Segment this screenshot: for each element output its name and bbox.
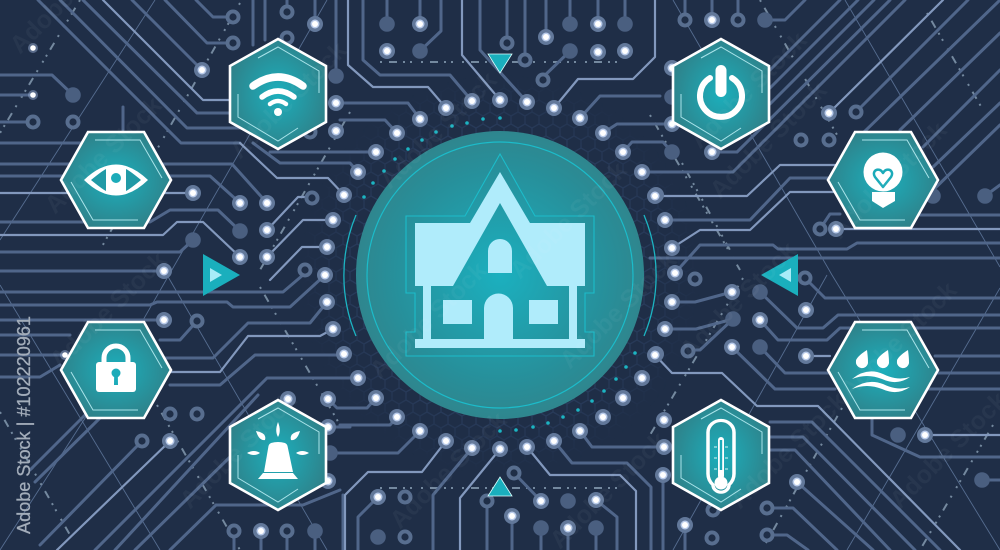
watermark text: Adobe Stock [674,236,802,364]
watermark text: Adobe Stock [684,26,812,154]
icon: wifi [253,77,303,116]
icon: thermometer [708,420,734,492]
watermark text: Adobe Stock [44,246,172,374]
stock id label: Adobe Stock | #102220961 [14,316,34,534]
circuit traces: bottom right [655,278,1000,550]
teal dots around the circle [362,116,637,433]
icon: house [415,172,585,348]
watermark text: Adobe Stock [224,36,352,164]
circuit traces: bottom left [30,378,420,550]
watermark text: Adobe Stock [724,386,852,514]
triangle marker: right [761,254,798,296]
hexagon mesh behind the central circle [326,100,676,450]
icon: siren [247,422,309,479]
watermark text: Adobe Stock [384,406,512,534]
watermark text: Adobe Stock [364,256,492,384]
triangle marker: left [203,254,240,296]
panel: eye hexagon [61,132,171,228]
circuit traces: top centre [340,0,672,133]
icon: power [700,65,742,117]
panel: thermometer hexagon [673,400,769,510]
icon: water drops and waves [852,350,910,392]
watermark text: Adobe Stock [824,116,952,244]
panel: bulb hexagon [828,132,938,228]
house outline [406,154,594,356]
circuit traces: top right [623,0,1000,273]
watermark text: Adobe Stock [374,66,502,194]
panel: lock hexagon [61,322,171,418]
watermark text: Adobe Stock [554,246,682,374]
circuit traces: top left [0,0,376,195]
watermark text: Adobe Stock [39,91,167,219]
panel: water hexagon [828,322,938,418]
icon: padlock [96,346,136,392]
central circle with house [356,131,644,419]
circuit traces: bottom centre [345,431,660,550]
watermark text: Adobe Stock [704,76,832,204]
circuit traces: left [0,143,343,385]
panel: wifi hexagon [230,39,326,149]
side arcs around the circle [344,215,656,336]
icon: eye [84,164,148,196]
triangle marker: bottom [488,477,512,496]
icon: light bulb [864,152,902,208]
panel: alarm hexagon [230,400,326,510]
panel: power hexagon [673,39,769,149]
triangle marker: top [488,54,512,73]
watermark text: Adobe Stock [174,386,302,514]
watermark text: Adobe Stock [834,276,962,404]
watermark text: Adobe Stock [504,156,632,284]
